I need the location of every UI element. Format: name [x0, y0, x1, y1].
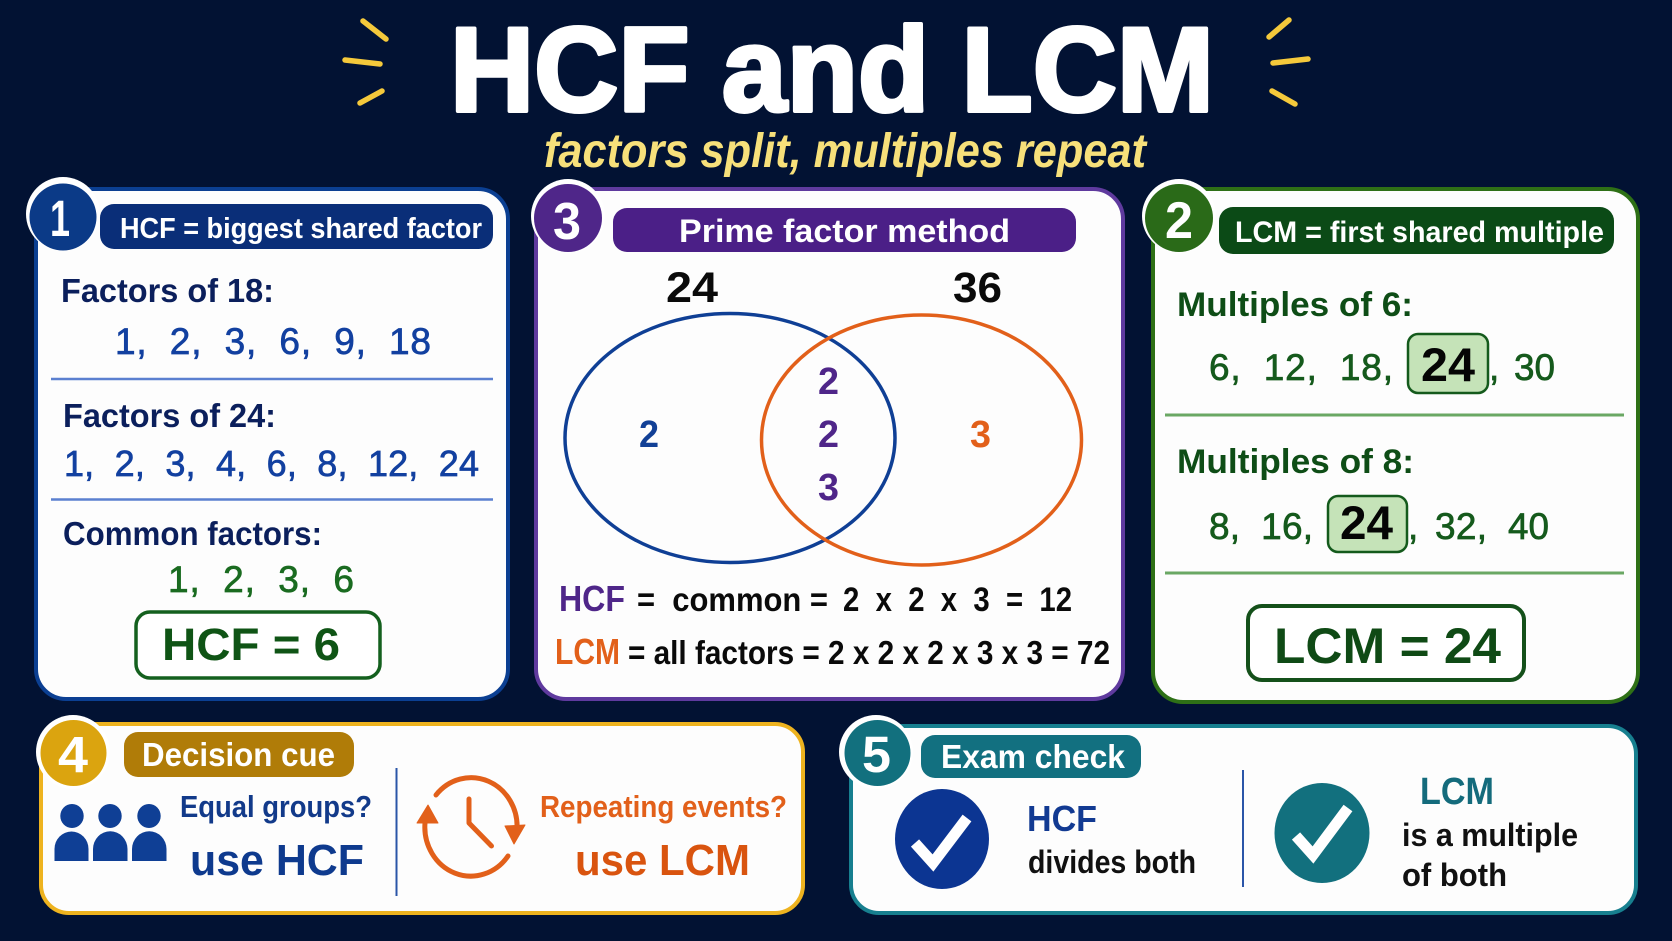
common factors [63, 515, 354, 600]
common factors: 1, 2, 3, 6 [168, 559, 354, 600]
LCM check text: LCM [1420, 771, 1494, 813]
multiples of 8: Multiples of 8: [1177, 443, 1414, 481]
panel 4: decision cue [36, 715, 803, 913]
icon: left sparkle rays [345, 21, 386, 103]
venn diagram: 3 [818, 467, 839, 509]
icon: three people [54, 804, 166, 861]
common factors: Common factors: [63, 515, 322, 552]
repeating events text: Repeating events? [540, 789, 787, 824]
badge 4: 4 [58, 726, 89, 783]
equal groups text: Equal groups? [180, 789, 372, 824]
LCM check text: of both [1402, 857, 1507, 893]
multiples of 6: 6, 12, 18, [1209, 347, 1393, 388]
factors of 18: 1, 2, 3, 6, 9, 18 [115, 321, 431, 362]
badge 4 [36, 715, 110, 789]
multiples of 6: 30 [1514, 347, 1555, 388]
subtitle: factors split, multiples repeat [544, 125, 1148, 178]
multiples of 6 [1177, 286, 1555, 393]
badge 2 [1142, 179, 1216, 253]
repeating events text: use LCM [575, 836, 750, 885]
venn diagram: 2 [818, 361, 839, 403]
badge 5: 5 [862, 726, 891, 783]
heading pill 3 [613, 208, 1076, 252]
heading pill 1 [100, 204, 493, 249]
badge 5 [839, 715, 913, 789]
result: LCM = 24 [1248, 606, 1524, 680]
LCM formula: LCM [555, 631, 620, 672]
panel 3: prime factor method [531, 179, 1123, 699]
LCM formula: = all factors = 2 x 2 x 2 x 3 x 3 = 72 [628, 634, 1110, 671]
HCF check text: HCF [1027, 798, 1097, 839]
factors of 24: 1, 2, 3, 4, 6, 8, 12, 24 [64, 443, 479, 484]
LCM check text [1402, 771, 1578, 893]
LCM check text: is a multiple [1402, 817, 1578, 853]
heading pill 4: Decision cue [142, 736, 335, 773]
multiples of 6: , [1489, 347, 1499, 388]
multiples of 8: 8, 16, [1209, 506, 1313, 547]
multiples of 8: , [1408, 506, 1418, 547]
badge 1 [26, 177, 100, 251]
HCF formula [559, 578, 1072, 619]
multiples of 8: 24 [1340, 496, 1393, 549]
icon: repeating clock [417, 778, 525, 876]
venn diagram: 2 [818, 414, 839, 456]
venn diagram [565, 264, 1082, 565]
multiples of 6: 24 [1421, 338, 1475, 391]
title: HCF and LCM [450, 3, 1214, 137]
result: LCM = 24: LCM = 24 [1274, 618, 1501, 674]
heading pill 2: LCM = first shared multiple [1235, 216, 1604, 249]
heading pill 3: Prime factor method [679, 213, 1010, 249]
factors of 18: Factors of 18: [61, 272, 274, 309]
HCF check text: divides both [1028, 844, 1196, 880]
badge 3 [531, 179, 605, 253]
icon: LCM check [1274, 783, 1370, 883]
panel 5: exam check [839, 715, 1636, 913]
heading pill 2 [1219, 207, 1614, 254]
heading pill 5: Exam check [941, 738, 1126, 775]
factors of 18 [61, 272, 431, 362]
heading pill 1: HCF = biggest shared factor [120, 213, 482, 245]
factors of 24 [63, 397, 479, 484]
equal groups text: use HCF [190, 836, 364, 885]
venn diagram: 36 [953, 264, 1002, 312]
badge 2: 2 [1165, 192, 1193, 250]
multiples of 8: 32, [1435, 506, 1487, 547]
factors of 24: Factors of 24: [63, 397, 276, 434]
venn diagram: 24 [666, 264, 718, 312]
icon: HCF check [895, 789, 989, 889]
HCF formula: = common = [637, 581, 828, 618]
multiples of 6: Multiples of 6: [1177, 286, 1413, 324]
panel 2: LCM [1142, 179, 1638, 702]
equal groups text [180, 789, 372, 885]
HCF check text [1027, 798, 1196, 880]
repeating events text [540, 789, 787, 885]
HCF formula: HCF [559, 578, 625, 619]
venn diagram: 3 [970, 414, 991, 456]
result: HCF = 6 [136, 612, 380, 678]
multiples of 8: 40 [1508, 506, 1549, 547]
HCF formula: 2 x 2 x 3 = 12 [843, 581, 1072, 619]
result: HCF = 6: HCF = 6 [162, 619, 340, 670]
venn diagram: 2 [639, 414, 659, 456]
multiples of 8 [1177, 443, 1549, 552]
badge 3: 3 [553, 193, 581, 251]
badge 1: 1 [50, 190, 70, 247]
icon: right sparkle rays [1269, 20, 1308, 104]
panel 1: HCF [26, 177, 508, 699]
